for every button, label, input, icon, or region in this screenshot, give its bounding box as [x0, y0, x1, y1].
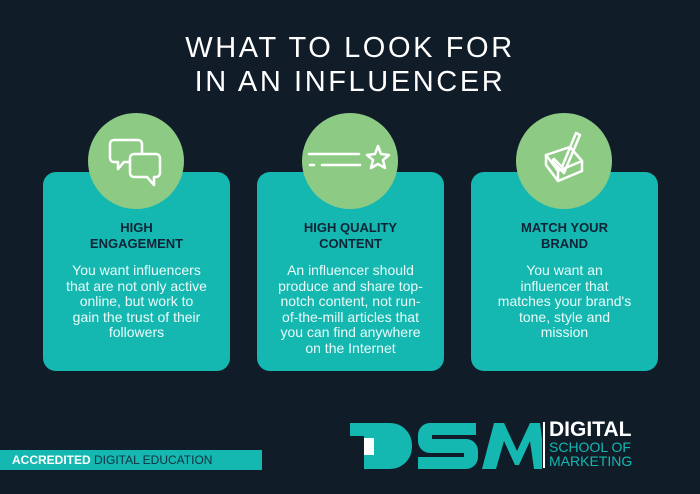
text: high engagement: gain the trust of their — [73, 308, 200, 324]
panel: high quality content — [257, 172, 444, 371]
text: match brand: mission — [541, 324, 588, 340]
text: quality content: you can find anywhere — [280, 324, 421, 340]
heading: high engagement — [90, 220, 183, 251]
heading: match brand: BRAND — [541, 236, 588, 251]
heading: high engagement: HIGH — [120, 220, 153, 235]
icon: lines with star — [302, 113, 398, 209]
heading: match brand — [521, 220, 608, 251]
text: high engagement — [66, 262, 207, 340]
icon: checkbox — [516, 113, 612, 209]
text: quality content: An influencer should — [287, 262, 414, 278]
title: IN AN INFLUENCER — [195, 66, 505, 98]
text: high engagement: You want influencers — [72, 262, 201, 278]
text: quality content — [278, 262, 423, 356]
panel: match your brand — [471, 172, 658, 371]
footer badge: accredited: ACCREDITED DIGITAL EDUCATION — [12, 453, 212, 467]
logo text: DIGITAL — [549, 418, 631, 441]
text: high engagement: that are not only active — [66, 278, 207, 294]
text: match brand: tone, style and — [519, 308, 610, 324]
text: quality content: notch content, not run- — [280, 293, 421, 309]
text: quality content: produce and share top- — [278, 278, 423, 294]
footer badge: accredited — [0, 450, 262, 470]
heading: quality content: HIGH QUALITY — [304, 220, 397, 235]
text: match brand: influencer that — [521, 278, 608, 294]
text: high engagement: followers — [109, 324, 164, 340]
heading: quality content — [304, 220, 397, 251]
text: match brand — [498, 262, 631, 340]
logo: DSM: MARKETING — [549, 453, 632, 469]
heading: match brand: MATCH YOUR — [521, 220, 608, 235]
logo: DSM: SCHOOL OF — [549, 439, 631, 455]
icon: chat bubbles — [88, 113, 184, 209]
text: quality content: on the Internet — [305, 340, 396, 356]
text: match brand: You want an — [526, 262, 603, 278]
title — [185, 32, 515, 98]
title: WHAT TO LOOK FOR — [185, 32, 515, 64]
heading: quality content: CONTENT — [319, 236, 382, 251]
heading: high engagement: ENGAGEMENT — [90, 236, 183, 251]
text: high engagement: online, but work to — [80, 293, 193, 309]
text: quality content: of-the-mill articles that — [282, 308, 419, 324]
logo: DSM — [350, 418, 632, 469]
text: match brand: matches your brand's — [498, 293, 631, 309]
panel: high engagement — [43, 172, 230, 371]
